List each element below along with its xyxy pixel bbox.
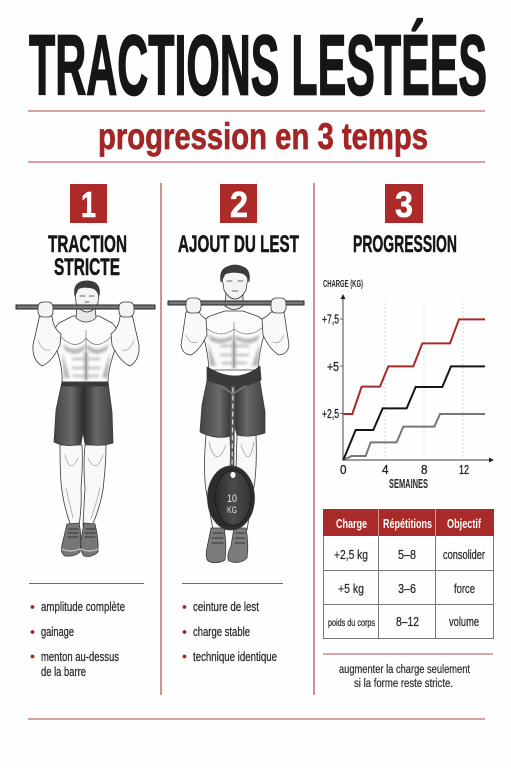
arms (33, 314, 61, 366)
shorts (54, 382, 113, 446)
line chart: load over weeks: 8 (421, 462, 428, 477)
legs (60, 445, 82, 526)
list: step 1 points (29, 584, 144, 679)
list: step 1 points: de la barre (41, 665, 86, 679)
line chart: load over weeks: 0 (340, 462, 346, 477)
list: step 1 points: gainage (41, 625, 74, 639)
panel: step 3 heading (353, 184, 457, 258)
panel: step 2 heading: AJOUT DU LEST (178, 231, 299, 258)
bar (168, 301, 304, 305)
series: black line (343, 366, 485, 460)
line chart: load over weeks: 4 (382, 462, 388, 477)
neck and head (225, 292, 243, 310)
line chart: load over weeks: +5 (327, 359, 339, 374)
panel: step 1 heading (48, 184, 127, 281)
list: step 2 points: ceinture de lest (193, 600, 259, 614)
panel: step 3 heading: 3 (395, 184, 413, 225)
illustration: weighted pull-up athlete: KG (227, 505, 237, 515)
line chart: load over weeks: 12 (459, 462, 469, 477)
line chart: load over weeks: +2,5 (322, 406, 339, 421)
belt (207, 366, 261, 388)
table: charge, repetitions, objective: volume (449, 614, 479, 629)
torso (54, 316, 118, 383)
list: step 1 points: amplitude complète (41, 600, 125, 614)
line chart: load over weeks (322, 279, 494, 491)
subtitle: progression en 3 temps (98, 116, 428, 157)
list: step 2 points (182, 584, 283, 664)
table: charge, repetitions, objective: 8–12 (396, 614, 419, 629)
table: charge, repetitions, objective: force (454, 581, 475, 596)
note (323, 654, 493, 690)
shorts (200, 376, 265, 437)
hands (38, 302, 53, 317)
chain (232, 388, 233, 470)
table: charge, repetitions, objective: consolider (443, 547, 485, 562)
panel: step 1 heading: STRICTE (54, 254, 120, 281)
axis label: semaines: SEMAINES (389, 477, 428, 491)
list: step 2 points: charge stable (193, 625, 250, 639)
illustration: weighted pull-up athlete: 10 (227, 493, 237, 505)
table: charge, repetitions, objective: +2,5 kg (334, 547, 368, 562)
note: augmenter la charge seulement (339, 664, 471, 676)
table: charge, repetitions, objective (323, 509, 494, 638)
panel: step 1 heading: 1 (81, 184, 96, 225)
torso (202, 311, 265, 370)
table: charge, repetitions, objective: Objectif (447, 516, 481, 531)
panel: step 2 heading: 2 (230, 184, 248, 225)
note: si la forme reste stricte. (354, 678, 453, 690)
bar (16, 305, 155, 309)
list: step 2 points: technique identique (193, 650, 277, 664)
shoes (61, 523, 81, 556)
legs (204, 435, 231, 530)
shoes (206, 528, 226, 563)
arms (181, 312, 207, 355)
table: charge, repetitions, objective: 3–6 (398, 581, 416, 596)
illustration: strict pull-up athlete (16, 281, 155, 556)
line chart: load over weeks: +7,5 (322, 312, 339, 326)
series: gray line (343, 414, 485, 460)
list: step 1 points: menton au-dessus (41, 650, 119, 664)
table: charge, repetitions, objective: Charge (336, 516, 367, 531)
table: charge, repetitions, objective: poids du corps (328, 618, 375, 629)
panel: step 1 heading: TRACTION (48, 231, 127, 258)
table: charge, repetitions, objective: +5 kg (338, 581, 364, 596)
table: charge, repetitions, objective: Répétitions (383, 516, 432, 531)
series: red line (343, 319, 485, 414)
neck and head (76, 306, 96, 322)
hands (186, 298, 201, 313)
weight plate (208, 466, 254, 530)
axis label: charge: CHARGE (KG) (323, 279, 363, 290)
panel: step 2 heading (178, 184, 299, 258)
table: charge, repetitions, objective: 5–8 (398, 547, 416, 562)
illustration: weighted pull-up athlete (168, 265, 304, 563)
